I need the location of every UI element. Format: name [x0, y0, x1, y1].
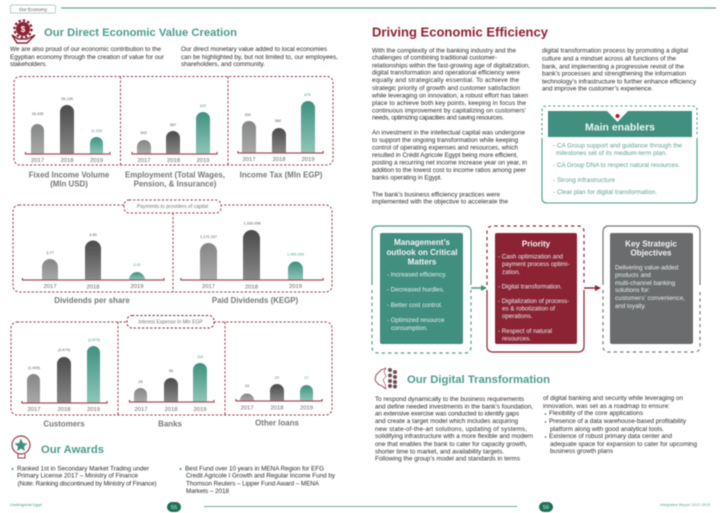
chart captions: top row — [29, 170, 323, 188]
panel: main enablers: - CA Group support and guidance through the — [553, 142, 682, 150]
panel: management's outlook: Matters — [408, 258, 437, 266]
digital text column one: one that enables the bank to cater for capacity growth, — [375, 441, 527, 448]
chart: Other loans: 2019 — [300, 406, 313, 412]
digital text column one: and create a target model which includes acquiring — [375, 418, 518, 425]
chart: Employment: 2017 — [137, 158, 151, 164]
section tag: Our Economy — [10, 5, 56, 13]
panel: key strategic objectives: customers’ convenience, — [615, 295, 685, 302]
panel: priority: payment process optimi- — [502, 261, 569, 268]
body text column one: implemented with the objective to accelerate the — [372, 199, 508, 206]
digital text column one: solidifying infrastructure with a more flexible and modern — [375, 433, 533, 440]
chart: Income Tax — [238, 93, 323, 163]
panel: interest expense frame — [11, 316, 332, 415]
digital text column two: innovation, was set as a roadmap to ensure: — [543, 403, 670, 410]
icon: award star — [12, 436, 30, 458]
panel: priority: - Respect of natural — [498, 328, 552, 335]
chart captions: top row: Fixed Income Volume — [29, 170, 110, 180]
chart: Dividends per share: 4.89 — [89, 233, 97, 237]
awards list right — [180, 466, 336, 495]
body text column two: bank, and implementing a progressive revisit of the — [542, 63, 684, 70]
chart: Other loans: 27 — [275, 376, 279, 380]
body text column one: posting a recurring net income increase year on year, in — [372, 160, 527, 167]
chart: Income Tax: 560 — [275, 119, 281, 123]
awards list left — [12, 466, 156, 488]
footer left: Credit Agricole Egypt — [10, 503, 42, 507]
awards list right: Thomson Reuters – Lipper Fund Award – MENA — [186, 480, 320, 488]
chart: Banks: 2019 — [193, 407, 207, 413]
digital text column two: Flexibility of the core applications — [549, 410, 643, 417]
chart: Banks: 118 — [197, 355, 203, 359]
body text column one: continuous improvement by capitalizing on customers’ — [372, 107, 527, 114]
chart: Dividends per share: 3.77 — [46, 251, 54, 255]
body text column one: equally and strategically essential. To achieve the — [372, 77, 519, 84]
panel: key strategic objectives: Delivering value-added — [615, 264, 679, 272]
chart: Paid Dividends: 1,316,098 — [244, 222, 260, 226]
body text column one: needs, optimizing capacities and saving resources. — [372, 114, 504, 121]
awards list left: Ranked 1st in Secondary Market Trading under — [17, 466, 149, 472]
header rule — [61, 7, 716, 9]
panel: priority — [487, 226, 584, 352]
panel: main enablers: milestones set of its medium-term plan. — [556, 150, 667, 157]
chart: Employment: 2018 — [167, 158, 181, 164]
chart captions: bottom row: Customers — [43, 420, 85, 428]
footer right: Integrated Report 2017-2019 — [660, 503, 710, 507]
panel: management's outlook: - Decreased hurdles. — [387, 286, 445, 294]
panel: main enablers: - CA Group DNA to respect natural resources. — [553, 162, 680, 169]
body text column one: addition to the lowest cost to income ratios among peer — [372, 167, 526, 174]
chart: Paid Dividends: 2019 — [289, 284, 302, 290]
panel: priority: resources. — [502, 336, 531, 342]
digital text column one: shorter time to market, and availability targets. — [375, 448, 504, 455]
panel: payments to providers of capital frame: Payments to providers of capital — [137, 204, 208, 210]
chart captions: top row: Employment (Total Wages, — [125, 170, 225, 180]
chart: Fixed Income Volume: 2017 — [31, 158, 44, 164]
intro text left: We are also proud of our economic contribution to the — [10, 46, 161, 53]
title: our awards: Our Awards — [41, 444, 104, 456]
panel: management's outlook: - Optimized resource — [387, 317, 445, 324]
body text column two: digital transformation process by promoting a digital — [542, 47, 688, 54]
icon: gear with dollar and hand: $ — [21, 25, 26, 34]
arrow: outlook to priority — [471, 285, 487, 291]
intro text left — [10, 46, 164, 68]
icon: digital transformation — [375, 368, 397, 389]
panel: priority: - Digitalization of process- — [498, 298, 569, 305]
footer right — [360, 502, 710, 512]
chart: Fixed Income Volume: 2018 — [60, 158, 74, 164]
title: driving economic efficiency: Driving Economic Efficiency — [372, 24, 549, 40]
panel: priority: - Digital transformation. — [498, 284, 562, 290]
digital text column two: Existence of robust primary data center and — [549, 433, 672, 440]
body text column one: With the complexity of the banking industry and the — [372, 48, 516, 54]
digital text column two: business growth plans — [550, 448, 613, 455]
chart: Other loans — [236, 376, 322, 412]
chart: Income Tax: 591 — [245, 113, 251, 117]
body text column one — [371, 48, 530, 206]
chart: Customers: (1,405) — [28, 366, 41, 370]
chart: Income Tax: 2017 — [242, 157, 256, 163]
chart: Banks — [130, 355, 214, 413]
chart captions: bottom row — [43, 418, 300, 428]
digital text column two: Presence of a data warehouse-based profitability — [549, 418, 687, 425]
panel: main enablers — [542, 106, 697, 203]
panel: priority: Priority — [522, 240, 551, 248]
digital text column one — [375, 396, 533, 463]
body text column two: bank’s processes and strengthening the information — [542, 70, 686, 77]
body text column one: to support the ongoing transformation while keeping — [372, 137, 518, 144]
digital text column one: Following the group’s model and standards in terms — [375, 456, 520, 463]
title: our digital transformation: Our Digital Transformation — [407, 374, 550, 386]
intro text right — [181, 46, 338, 68]
digital text column two: of digital banking and security while leveraging on — [543, 395, 683, 402]
chart: Customers: (2,879) — [88, 338, 101, 342]
panel: main enablers: - Clear plan for digital transformation. — [553, 189, 657, 196]
body text column two: and improve the customer’s experience. — [542, 85, 653, 92]
chart: Other loans: 2017 — [240, 406, 254, 412]
chart: Employment: 503 — [140, 131, 147, 135]
section tag: Our Economy: Our Economy — [19, 7, 48, 12]
footer right: 56 — [543, 505, 549, 511]
intro text right: shareholders, and community. — [181, 61, 265, 68]
panel: management's outlook: consumption. — [391, 325, 428, 332]
chart captions: top row: (Mln USD) — [50, 180, 88, 188]
chart: Fixed Income Volume: 11,025 — [91, 129, 102, 133]
body text column one: banks operating in Egypt. — [372, 174, 442, 181]
chart: Fixed Income Volume — [26, 97, 110, 164]
panel: priority: operations. — [502, 313, 533, 320]
chart: Employment: 820 — [200, 104, 206, 108]
chart: Paid Dividends: 2017 — [202, 284, 215, 290]
chart captions: bottom row: Other loans — [255, 418, 300, 428]
body text column one: challenges of combining traditional customer- — [372, 55, 497, 62]
body text column one: digital transformation and operational efficiency were — [372, 69, 520, 76]
chart: Paid Dividends: 2018 — [245, 284, 259, 290]
body text column one: control of operating expenses and resources, which — [372, 144, 518, 151]
chart: Customers: 2017 — [27, 407, 41, 413]
panel: key strategic objectives: solutions for: — [615, 287, 650, 294]
chart captions: middle row: Paid Dividends (KEGP) — [212, 296, 299, 305]
digital text column two: platform along with good analytical tools. — [550, 426, 664, 433]
panel: key strategic objectives: Objectives — [631, 248, 672, 258]
chart: Paid Dividends: 1,172,157 — [200, 235, 217, 239]
body text column one: place to achieve both key points, keeping in focus the — [372, 100, 526, 107]
panel: priority: zation. — [502, 269, 521, 276]
chart captions: bottom row: Banks — [158, 420, 182, 428]
panel: key strategic objectives: products and — [615, 272, 651, 279]
panel: top chart row frame — [14, 76, 333, 165]
chart: Other loans: 15 — [245, 384, 249, 388]
panel: management's outlook: - Better cost control. — [387, 302, 443, 309]
footer left — [10, 502, 360, 512]
awards list right: Best Fund over 10 years in MENA Region for EFG — [185, 466, 324, 472]
chart: Income Tax: 875 — [304, 93, 311, 97]
icon: gear with dollar and hand — [12, 20, 35, 43]
chart: Income Tax: 2018 — [272, 157, 286, 163]
digital text column one: an extensive exercise was conducted to identify gaps — [375, 411, 519, 418]
panel: payments to providers of capital frame — [13, 200, 332, 292]
chart: Paid Dividends — [181, 222, 323, 290]
body text column two: technology’s infrastructure to further enhance efficiency — [542, 78, 697, 85]
body text column one: The bank’s business efficiency practices were — [372, 191, 500, 198]
awards list right: Credit Agricole I Growth and Regular Income Fund by — [186, 472, 336, 480]
chart: Customers: (2,474) — [58, 348, 71, 352]
chart: Fixed Income Volume: 16,435 — [32, 112, 43, 116]
chart: Customers: 2018 — [57, 407, 71, 413]
chart: Dividends per share: 2018 — [86, 284, 100, 290]
chart captions: middle row: Dividends per share — [54, 296, 130, 305]
body text column two — [542, 47, 697, 92]
chart: Banks: 2017 — [134, 407, 148, 413]
body text column two: culture and a mindset across all functions of the — [542, 56, 676, 63]
body text column one: strategic priority of growth and customer satisfaction — [372, 85, 520, 92]
chart: Banks: 25 — [138, 380, 143, 384]
panel: management's outlook: Management’s — [394, 238, 450, 247]
panel: key strategic objectives — [603, 226, 700, 352]
intro text left: stakeholders. — [10, 61, 47, 68]
digital text column one: To respond dynamically to the business requirements — [375, 396, 524, 403]
intro text left: Egyptian economy through the creation of value for our — [10, 54, 164, 61]
chart: Fixed Income Volume: 2019 — [90, 158, 103, 164]
panel: main enablers: Main enablers — [585, 122, 655, 134]
panel: priority: es & robotization of — [502, 306, 555, 312]
chart captions: middle row — [54, 296, 299, 305]
chart: Dividends per share — [22, 233, 164, 290]
chart: Employment — [132, 104, 217, 164]
chart: Other loans: 27 — [304, 376, 309, 380]
awards list right: Markets – 2018 — [186, 488, 229, 495]
body text column one: while leveraging on innovation, a robust effort has taken — [371, 92, 528, 99]
body text column one: An investment in the intellectual capital was undergone — [372, 130, 525, 136]
arrow: priority to objectives — [584, 285, 601, 291]
footer left: 55 — [171, 505, 177, 511]
chart captions: top row: Income Tax (Mln EGP) — [240, 170, 323, 180]
intro text right: can be highlighted by, but not limited to, our employees, — [181, 54, 338, 61]
chart: Employment: 2019 — [196, 158, 210, 164]
chart: Banks: 2018 — [164, 407, 178, 413]
chart: Banks: 66 — [169, 369, 173, 373]
panel: interest expense frame: Interest Expense In Mln EGP — [138, 320, 203, 326]
chart: Other loans: 2018 — [270, 406, 284, 412]
panel: management's outlook: outlook on Critical — [386, 248, 458, 257]
chart: Dividends per share: 2017 — [43, 284, 57, 290]
digital text column two: adequate space for expansion to cater for upcoming — [550, 441, 697, 448]
panel: priority: - Cash optimization and — [498, 254, 564, 260]
chart: Employment: 587 — [170, 123, 176, 127]
panel: management's outlook: - Increased efficiency. — [387, 272, 447, 278]
panel: key strategic objectives: multi-channel banking — [615, 280, 676, 287]
chart: Paid Dividends: 1,063,339 — [287, 252, 304, 256]
chart captions: top row: Pension, & Insurance) — [134, 180, 217, 188]
title: direct economic value: Our Direct Economic Value Creation — [44, 27, 237, 39]
body text column one: resulted in Crédit Agricole Egypt being more efficient, — [372, 152, 518, 159]
chart: Fixed Income Volume: 26,135 — [61, 97, 73, 101]
chart: Income Tax: 2019 — [301, 157, 315, 163]
digital text column one: and define needed investments in the bank’s foundation, — [375, 403, 533, 410]
digital text column one: new state-of-the-art solutions, updating of systems, — [375, 426, 527, 433]
panel: main enablers: - Strong infrastructure — [553, 177, 615, 184]
digital text column two — [543, 395, 697, 455]
panel: management's outlook — [372, 226, 471, 353]
chart: Dividends per share: 2019 — [130, 284, 144, 290]
chart: Customers — [22, 338, 107, 413]
panel: key strategic objectives: and loyalty. — [615, 303, 646, 310]
awards list left: (Note: Ranking discontinued by Ministry of Finance) — [18, 480, 156, 488]
panel: key strategic objectives: Key Strategic — [625, 240, 677, 248]
chart: Dividends per share: 3.42 — [133, 263, 141, 267]
body text column one: relationships within the fast-growing age of digitalization, — [372, 62, 530, 69]
awards list left: Primary License 2017 – Ministry of Finance — [17, 472, 138, 480]
chart: Customers: 2019 — [87, 407, 100, 413]
intro text right: Our direct monetary value added to local economies — [181, 46, 327, 53]
